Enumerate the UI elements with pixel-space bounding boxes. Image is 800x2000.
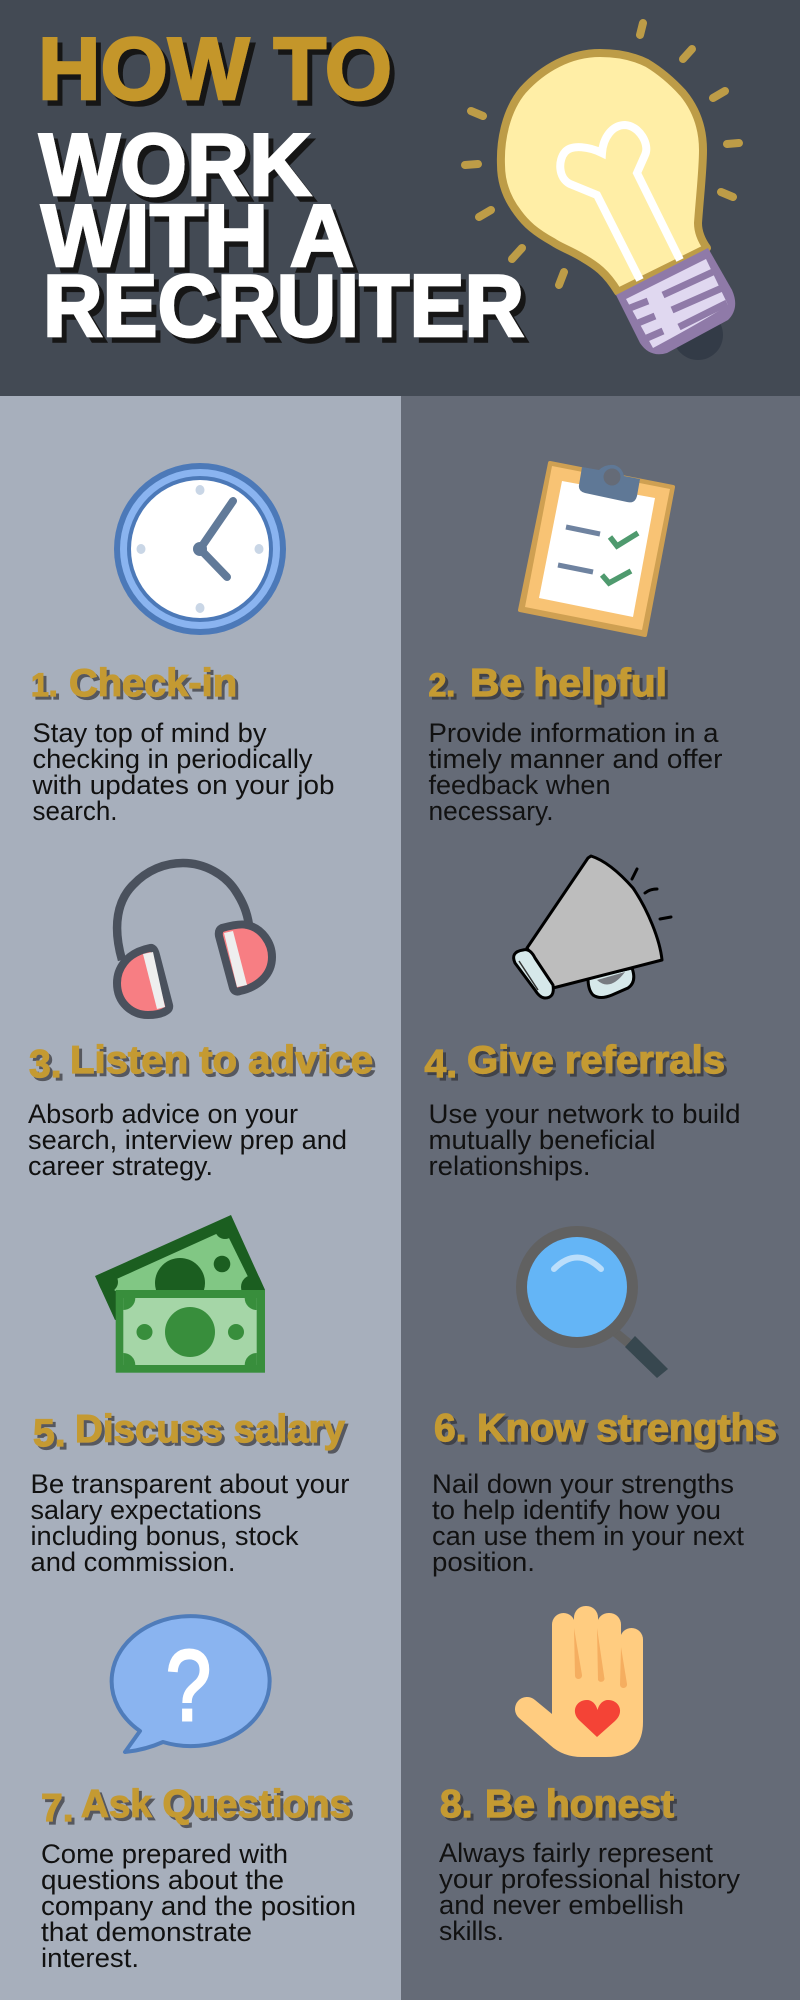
heading: Be honest	[485, 1783, 674, 1826]
body text: mutually beneficial	[428, 1125, 656, 1155]
heading: 3.	[29, 1043, 62, 1086]
body text: Provide information in a	[428, 718, 719, 748]
heading: 2.	[428, 667, 455, 703]
panel: header	[0, 0, 800, 396]
body text: with updates on your job	[31, 770, 335, 800]
heading: 7.	[41, 1787, 74, 1830]
body text: relationships.	[428, 1151, 590, 1181]
body text: checking in periodically	[32, 744, 313, 774]
heading: Be helpful	[470, 662, 667, 705]
body text: position.	[432, 1547, 535, 1577]
body text: including bonus, stock	[30, 1521, 299, 1551]
icon: magnifying glass	[516, 1226, 668, 1378]
heading: 4.	[424, 1043, 457, 1086]
body text: can use them in your next	[432, 1521, 744, 1551]
panel: 5 discuss salary	[30, 1215, 350, 1577]
body text: to help identify how you	[432, 1495, 721, 1525]
heading: Check-in	[69, 662, 237, 705]
panel: left column background	[0, 396, 401, 2000]
body text: questions about the	[41, 1865, 284, 1895]
heading: Give referrals	[467, 1039, 725, 1082]
icon: question speech bubble: ?	[166, 1630, 211, 1742]
panel: 1 check-in	[31, 463, 334, 826]
heading: 8.	[440, 1783, 473, 1826]
icon: clipboard	[520, 463, 673, 635]
heading: Know strengths	[477, 1407, 777, 1450]
body text: interest.	[41, 1943, 139, 1973]
body text: Come prepared with	[41, 1839, 288, 1869]
icon: question speech bubble	[112, 1616, 270, 1752]
body text: Nail down your strengths	[432, 1469, 734, 1499]
panel: 8 be honest	[439, 1606, 741, 1946]
title: work with a recruiter: WITH A	[41, 186, 354, 285]
body text: search, interview prep and	[28, 1125, 347, 1155]
body text: and never embellish	[439, 1890, 684, 1920]
heading: 1.	[31, 667, 58, 703]
icon: headphones	[117, 863, 272, 1015]
panel: 6 know strengths	[432, 1226, 777, 1577]
panel: right column background	[401, 396, 800, 2000]
body text: company and the position	[41, 1891, 356, 1921]
panel: 3 listen to advice	[28, 863, 373, 1181]
title: how to: HOW TO	[38, 19, 392, 118]
body text: and commission.	[30, 1547, 235, 1577]
title: work with a recruiter: WORK	[39, 115, 311, 214]
body text: skills.	[439, 1916, 504, 1946]
body text: Absorb advice on your	[28, 1099, 298, 1129]
body text: Stay top of mind by	[32, 718, 267, 748]
heading: 6.	[434, 1407, 467, 1450]
body text: necessary.	[428, 796, 554, 826]
heading: Listen to advice	[70, 1039, 373, 1082]
body text: Always fairly represent	[439, 1838, 713, 1868]
body text: salary expectations	[30, 1495, 262, 1525]
title: work with a recruiter: RECRUITER	[43, 256, 524, 355]
icon: clock	[114, 463, 286, 635]
panel: 2 be helpful	[428, 463, 722, 826]
body text: feedback when	[428, 770, 610, 800]
icon: light bulb	[465, 23, 739, 360]
heading: Ask Questions	[81, 1783, 351, 1826]
body text: Be transparent about your	[30, 1469, 350, 1499]
icon: megaphone	[514, 856, 671, 998]
heading: 5.	[33, 1412, 66, 1455]
body text: your professional history	[439, 1864, 741, 1894]
panel: 7 ask questions	[41, 1616, 356, 1973]
body text: Use your network to build	[428, 1099, 740, 1129]
body text: timely manner and offer	[428, 744, 722, 774]
body text: that demonstrate	[41, 1917, 252, 1947]
icon: hand with heart	[515, 1606, 643, 1757]
panel: 4 give referrals	[424, 856, 740, 1181]
heading: Discuss salary	[75, 1408, 345, 1451]
icon: money	[95, 1215, 269, 1377]
body text: search.	[32, 796, 118, 826]
body text: career strategy.	[28, 1151, 213, 1181]
